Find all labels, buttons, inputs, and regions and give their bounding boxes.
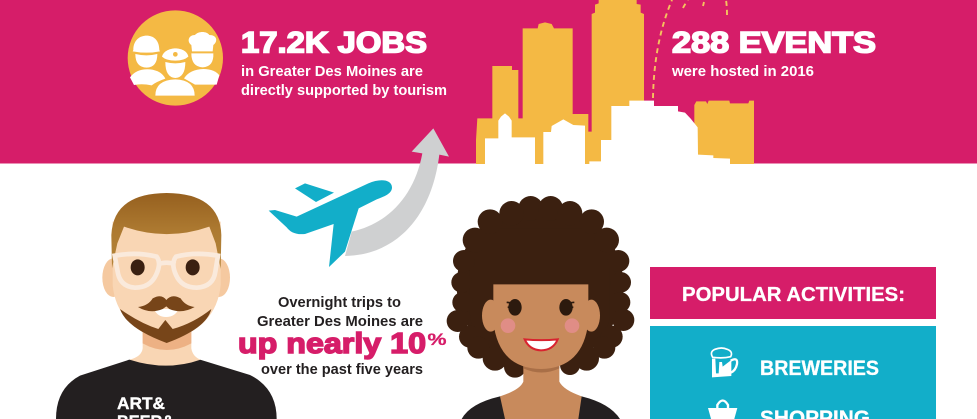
- neck and chest: [500, 362, 582, 419]
- cheeks: [501, 318, 515, 333]
- text: events description: were hosted in 2016: [671, 63, 814, 80]
- text: jobs description: in Greater Des Moines are: [241, 63, 423, 80]
- arrow: upward growth: [345, 128, 449, 256]
- panel: popular activities heading: POPULAR ACTIVITIES:: [682, 283, 905, 306]
- decoration: firework dashed trails: [653, 0, 727, 98]
- neck: [129, 328, 201, 366]
- icon: tourism workers: [128, 10, 223, 106]
- text: overnight trips statistic: Overnight trips to: [278, 294, 401, 311]
- panel: pink header band: [0, 0, 977, 164]
- panel: activities list: [650, 326, 936, 419]
- heading: jobs: 17.2K JOBS: [241, 26, 427, 60]
- text: shirt slogan: [117, 394, 174, 419]
- illustration: man with moustache: [56, 193, 277, 419]
- ears: [482, 300, 499, 332]
- eyes: [131, 259, 145, 275]
- text: breweries: BREWERIES: [760, 357, 879, 380]
- skyline: downtown buildings: [476, 0, 754, 164]
- text: overnight trips statistic: [238, 294, 446, 378]
- face: [493, 284, 588, 369]
- beard: [120, 309, 211, 343]
- text: jobs description: directly supported by tourism: [241, 82, 447, 99]
- hair: [111, 193, 221, 269]
- text: overnight trips statistic: Greater Des Moines are: [257, 313, 423, 330]
- glasses: [115, 254, 218, 288]
- text: overnight trips statistic: %: [428, 330, 446, 349]
- moustache: [138, 296, 195, 311]
- text: jobs description: [241, 63, 447, 99]
- smile: [525, 339, 558, 350]
- shirt: [462, 396, 620, 419]
- icon: beer mug: [711, 348, 737, 377]
- icon: airplane: [269, 180, 392, 267]
- illustration: woman with curly hair: [447, 196, 634, 419]
- icon: shopping bag: [708, 400, 737, 419]
- panel: popular activities heading: [650, 267, 936, 319]
- curly hair: [447, 196, 634, 378]
- mouth: [154, 309, 179, 317]
- ears: [102, 258, 124, 297]
- text: overnight trips statistic: over the past five years: [261, 361, 423, 378]
- face: [113, 222, 221, 342]
- heading: events: 288 EVENTS: [672, 26, 876, 60]
- text: shirt slogan: ART&: [117, 394, 165, 413]
- eyes: [508, 299, 522, 316]
- text: overnight trips statistic: up nearly 10: [238, 328, 426, 360]
- shirt: [56, 360, 277, 419]
